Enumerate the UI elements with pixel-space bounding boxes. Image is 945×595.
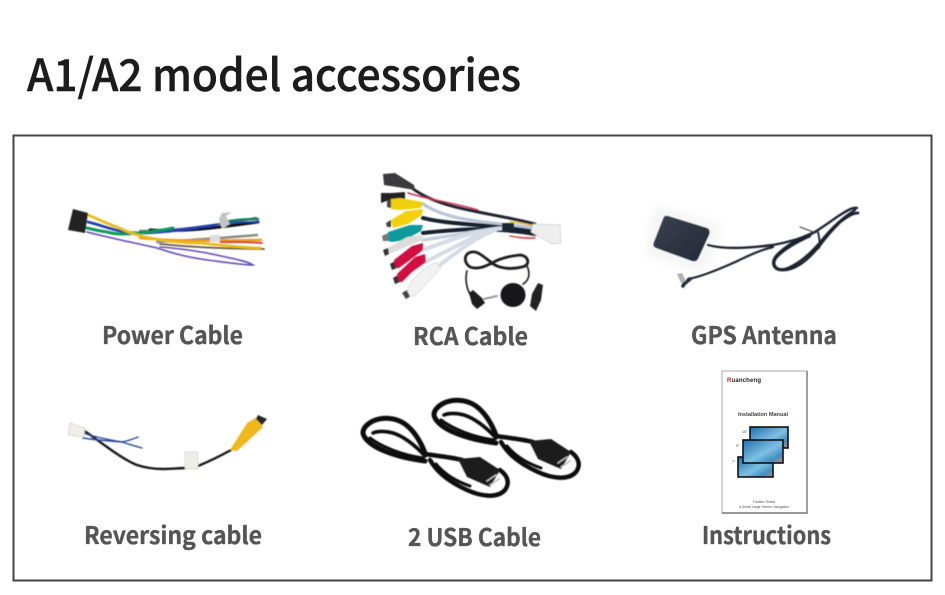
grey plug: [384, 235, 423, 255]
white connector: [531, 224, 561, 244]
teal plug: [382, 233, 388, 241]
white plug: [402, 290, 411, 299]
microphone: [465, 252, 528, 268]
icon: instructions manual: 9": [736, 444, 740, 448]
brand: Ruancheng: [727, 378, 761, 384]
screens: 10": [742, 430, 748, 434]
usb cable right: [434, 400, 579, 478]
connector: [68, 209, 88, 233]
footer: Fantstic Suiest: [753, 500, 775, 504]
top jack: [383, 173, 415, 190]
small plug: [381, 192, 405, 203]
icon: instructions manual: [722, 371, 807, 513]
icon: RCA cable: [381, 173, 561, 311]
usb cable left: [363, 418, 508, 496]
label: instructions: Instructions: [702, 516, 831, 551]
yellow plugs: [387, 199, 391, 208]
icon: power cable: [68, 209, 264, 265]
icon: USB cables: [363, 400, 579, 496]
title: A1/A2 model accessories: [27, 40, 521, 104]
icon: instructions manual: 7": [732, 460, 736, 464]
label: RCA cable: RCA Cable: [413, 317, 528, 352]
icon: GPS antenna: [645, 205, 858, 286]
icon: instructions manual: A Smart Large Screen Navigation: [739, 505, 789, 509]
label: reversing cable: Reversing cable: [84, 516, 262, 551]
red plugs: [390, 261, 397, 270]
plug and tag: [68, 423, 85, 437]
label: power cable: Power Cable: [102, 316, 243, 351]
label: 2 USB cable: 2 USB Cable: [408, 518, 541, 553]
panel: accessories frame: [14, 136, 932, 580]
icon: reversing cable: [68, 415, 267, 469]
label: GPS antenna: GPS Antenna: [691, 316, 837, 351]
manual heading: Installation Manual: [738, 412, 788, 418]
